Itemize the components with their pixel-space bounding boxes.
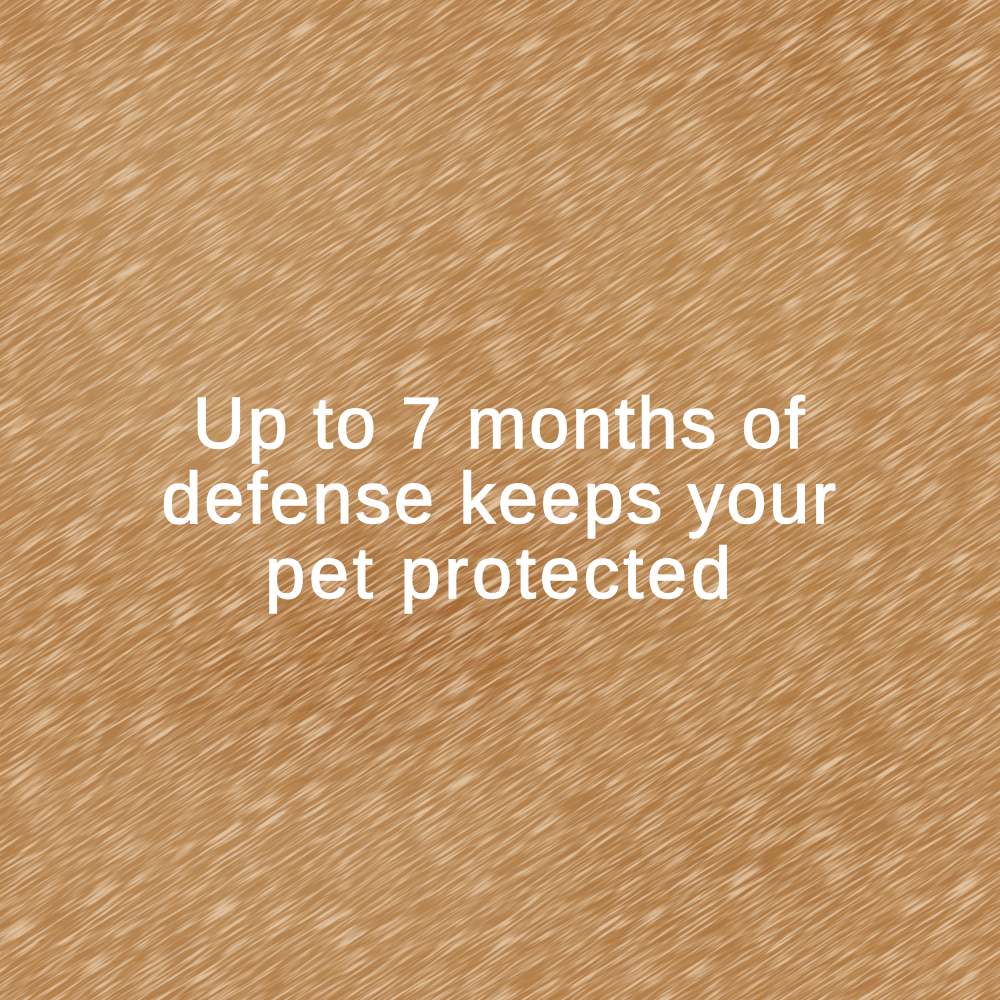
headline text xyxy=(161,384,839,614)
headline text: Up to 7 months of xyxy=(193,384,807,464)
headline text: defense keeps your xyxy=(161,459,839,539)
headline text: pet protected xyxy=(265,534,735,614)
